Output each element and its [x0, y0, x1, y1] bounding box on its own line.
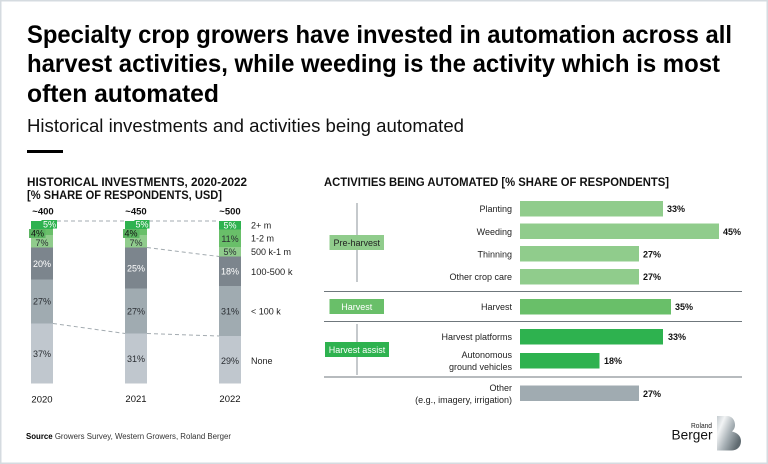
stacked bar: 2020: 4% [31, 229, 44, 239]
stacked bar: 2020: 7% [35, 238, 49, 248]
logo: Roland Berger: Roland [691, 423, 712, 430]
logo: Roland Berger: Berger [672, 426, 713, 442]
group: pre-harvest: 33% [667, 204, 685, 214]
stacked bar: 2022: 31% [221, 306, 239, 316]
group: pre-harvest: 27% [643, 250, 661, 260]
group: harvest: 35% [675, 302, 693, 312]
group: harvest: Harvest [481, 302, 512, 312]
panel: historical investments [27, 177, 293, 406]
stacked bar: 2020: 5% [43, 220, 56, 230]
stacked bar: 2021: 27% [127, 306, 145, 316]
stacked bar: 2020: 27% [33, 296, 51, 306]
group: pre-harvest: Planting [479, 204, 512, 214]
subtitle: Historical investments and activities being automated [27, 116, 464, 136]
stacked bar: 2021 [123, 206, 150, 405]
legend: investment size: 500 k-1 m [251, 247, 291, 257]
legend: investment size: 2+ m [251, 220, 271, 230]
group: other: (e.g., imagery, irrigation) [415, 395, 512, 405]
legend: investment size: None [251, 356, 273, 366]
stacked bar: 2021: 4% [124, 229, 138, 239]
source note: Source Growers Survey, Western Growers, Roland Berger [26, 432, 231, 441]
group: pre-harvest: 27% [643, 272, 661, 282]
connector lines [53, 221, 219, 336]
group: harvest assist: 18% [604, 356, 622, 366]
stacked bar: 2021: 5% [135, 220, 149, 230]
heading: activities being automated: ACTIVITIES BEING AUTOMATED [% SHARE OF RESPONDENTS] [324, 177, 669, 189]
stacked bar: 2020: 37% [33, 349, 51, 359]
stacked bar: 2022: ~500 [219, 206, 241, 218]
stacked bar: 2022: 18% [221, 266, 239, 276]
stacked bar: 2022: 29% [221, 356, 239, 366]
group: other: 27% [643, 389, 661, 399]
stacked bar: 2021: ~450 [125, 206, 147, 218]
accent rule [27, 150, 63, 153]
group: harvest assist: Harvest assist [329, 345, 386, 355]
group: harvest assist [325, 329, 686, 372]
stacked bar: 2020: 2020 [31, 394, 53, 406]
group: harvest [330, 299, 693, 314]
title: Specialty crop growers have invested in automation across all [27, 21, 732, 49]
stacked bar: 2021: 7% [129, 238, 143, 248]
title: harvest activities, while weeding is the activity which is most [27, 50, 721, 78]
stacked bar: 2020 [29, 206, 57, 406]
legend: investment size: < 100 k [251, 306, 281, 316]
stacked bar: 2020: 20% [33, 259, 51, 269]
group: harvest assist: Autonomous [461, 350, 512, 360]
logo: Roland Berger [672, 416, 741, 450]
group: pre-harvest: 45% [723, 227, 741, 237]
stacked bar: 2022: 5% [223, 247, 237, 257]
heading: historical investments: [% SHARE OF RESPONDENTS, USD] [27, 190, 222, 202]
stacked bar: 2022: 11% [221, 234, 239, 244]
group dividers [324, 203, 742, 377]
stacked bar: 2021: 2021 [125, 394, 147, 405]
legend: investment size [251, 220, 293, 366]
heading: historical investments: HISTORICAL INVESTMENTS, 2020-2022 [27, 177, 247, 189]
group: harvest assist: ground vehicles [449, 362, 512, 372]
group: harvest: Harvest [341, 302, 373, 312]
legend: investment size: 1-2 m [251, 234, 274, 244]
title [27, 21, 732, 108]
stacked bar: 2022: 5% [223, 220, 237, 230]
legend: investment size: 100-500 k [251, 267, 293, 277]
stacked bar: 2022: 2022 [219, 394, 241, 405]
stacked bar: 2020: ~400 [32, 206, 54, 218]
stacked bar: 2021: 25% [127, 264, 145, 274]
group: pre-harvest: Thinning [477, 250, 512, 260]
group: pre-harvest [330, 201, 741, 284]
panel: activities being automated [324, 177, 742, 405]
group: harvest assist: Harvest platforms [441, 332, 512, 342]
group: other [415, 383, 661, 405]
group: pre-harvest: Pre-harvest [333, 238, 380, 248]
group: other: Other [489, 383, 512, 393]
group: pre-harvest: Other crop care [449, 272, 512, 282]
stacked bar: 2021: 31% [127, 354, 145, 364]
title: often automated [27, 80, 219, 108]
stacked bar: 2022 [219, 206, 241, 405]
group: pre-harvest: Weeding [477, 227, 512, 237]
heading: historical investments [27, 177, 247, 202]
group: harvest assist: 33% [668, 332, 686, 342]
